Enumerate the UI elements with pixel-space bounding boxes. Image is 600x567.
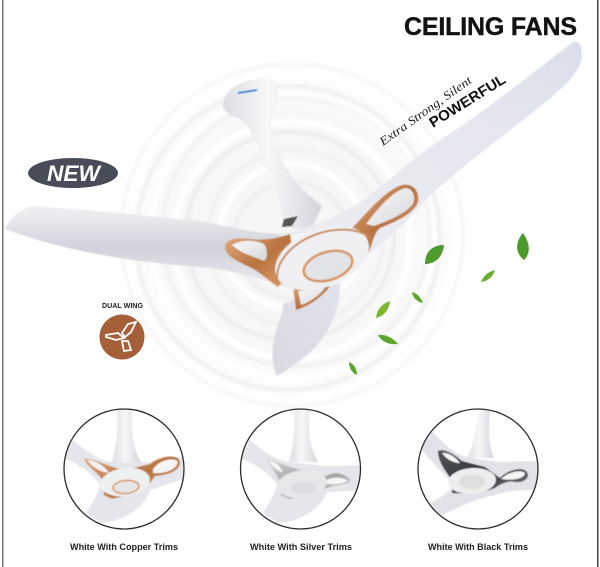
tagline xyxy=(376,72,509,149)
hub inner ring xyxy=(300,245,356,287)
leaf xyxy=(425,245,444,264)
swirl background xyxy=(120,63,464,407)
hub copper edge xyxy=(277,230,370,284)
leaf xyxy=(517,233,529,260)
left blade xyxy=(5,206,300,290)
hub disc xyxy=(266,213,378,303)
title: CEILING FANS xyxy=(404,13,577,41)
caption: black: White With Black Trims xyxy=(428,542,528,553)
circle: silver trims xyxy=(239,405,367,529)
leaf xyxy=(376,301,390,318)
leaves xyxy=(349,233,529,375)
leaf xyxy=(412,292,423,303)
right blade xyxy=(275,42,582,255)
fan downrod xyxy=(223,78,322,232)
rear blade bracket xyxy=(282,216,298,227)
leaf xyxy=(481,270,495,282)
new badge xyxy=(28,158,118,188)
tagline: Extra Strong, Silent xyxy=(376,73,475,149)
dual wing label: DUAL WING xyxy=(102,301,143,310)
right copper trim xyxy=(352,185,418,254)
main fan xyxy=(5,42,582,376)
leaf xyxy=(378,335,398,344)
caption: copper: White With Copper Trims xyxy=(70,542,178,553)
dual wing icon xyxy=(100,314,144,360)
circle: black trims xyxy=(418,405,540,529)
caption: silver: White With Silver Trims xyxy=(250,542,352,553)
leaf xyxy=(349,362,357,375)
left copper trim xyxy=(225,234,295,287)
new badge: NEW xyxy=(47,161,102,186)
circle: copper trims xyxy=(62,405,190,529)
bottom blade xyxy=(272,283,340,376)
tagline: POWERFUL xyxy=(427,72,509,131)
bottom copper trim xyxy=(293,283,332,310)
fan logo xyxy=(238,90,257,93)
